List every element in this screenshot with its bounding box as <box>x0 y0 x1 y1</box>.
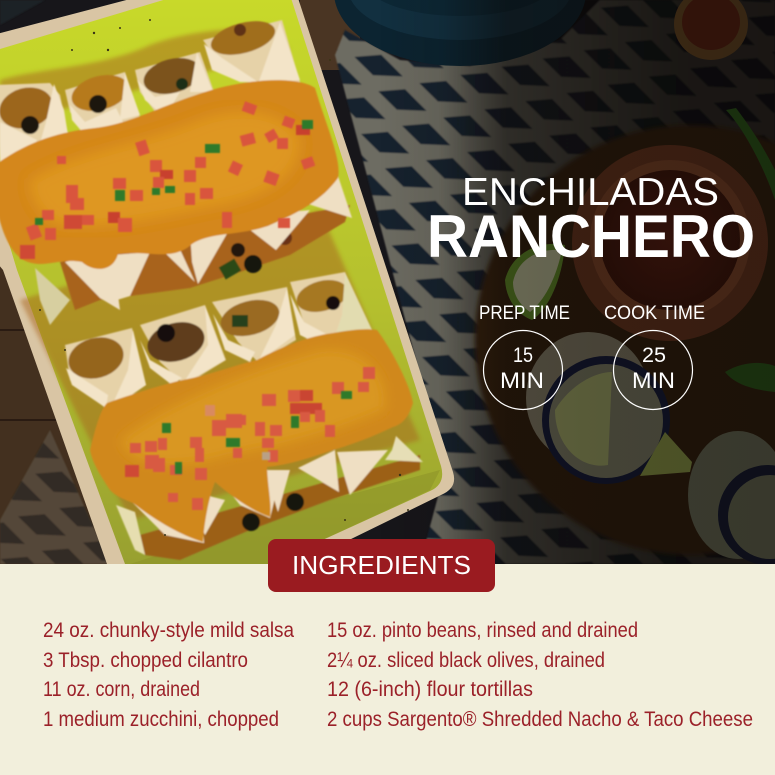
top fillings <box>0 15 279 134</box>
prep time badge: MIN <box>500 368 544 393</box>
ingredient list: left column: 11 oz. corn, drained <box>43 678 200 701</box>
dish speckles <box>39 19 409 536</box>
small spoon of salsa <box>674 0 748 60</box>
ingredients heading banner <box>268 539 495 592</box>
top tortilla flaps <box>0 22 300 165</box>
olives in lower filling <box>242 493 304 531</box>
tomato topping lower <box>125 367 375 510</box>
upper bottom tortilla flaps <box>35 170 352 325</box>
ingredients heading banner: INGREDIENTS <box>292 550 471 580</box>
cook time badge <box>604 303 705 410</box>
cook time badge: COOK TIME <box>604 303 705 324</box>
lower filling <box>140 455 420 560</box>
title: enchiladas ranchero: RANCHERO <box>427 203 755 270</box>
margarita glass <box>526 332 670 484</box>
cook time badge: 25 <box>642 343 666 367</box>
green chili peppers <box>725 108 775 392</box>
round wooden board <box>475 125 775 555</box>
woven ikat fabric <box>0 0 775 564</box>
upper bottom filling <box>60 205 350 310</box>
cook time badge: MIN <box>632 368 675 393</box>
lower cheese blanket <box>90 329 413 542</box>
baked sauce stains on dish <box>0 25 420 520</box>
ingredient list: left column: 1 medium zucchini, chopped <box>43 708 279 731</box>
ingredient list: right column: 15 oz. pinto beans, rinsed and drained <box>327 619 638 642</box>
dish rim <box>0 0 454 564</box>
prep time badge: PREP TIME <box>479 303 570 324</box>
ingredient list: right column: 12 (6-inch) flour tortillas <box>327 678 533 701</box>
baking dish <box>0 0 454 564</box>
green chili topping upper <box>35 120 313 225</box>
prep time badge <box>479 303 570 410</box>
wooden table <box>0 0 360 564</box>
lower top tortilla flaps <box>66 273 372 410</box>
green chili topping lower <box>162 391 352 474</box>
lower top tortilla cones <box>65 272 372 410</box>
ingredient list: right column: 2¼ oz. sliced black olives, drained <box>327 649 605 672</box>
ingredients panel background <box>0 564 775 775</box>
tomato topping upper <box>20 101 315 259</box>
lower top fillings <box>64 275 351 385</box>
lime wedge <box>505 244 565 320</box>
ingredient list: left column: 24 oz. chunky-style mild salsa <box>43 619 294 642</box>
prep time badge: 15 <box>513 343 533 367</box>
title: enchiladas ranchero <box>427 171 755 270</box>
cast shadow along dish bottom <box>130 470 440 564</box>
lime garnish slice <box>640 432 692 476</box>
lower enchilada row <box>64 272 423 560</box>
upper cheese blanket <box>0 80 339 269</box>
clay salsa bowl <box>572 145 768 341</box>
zucchini and olives in filling <box>219 231 292 280</box>
ingredient list: left column <box>43 619 294 731</box>
ingredient list: left column: 3 Tbsp. chopped cilantro <box>43 649 248 672</box>
upper enchilada row <box>0 15 352 325</box>
lower tortilla flaps <box>116 436 423 555</box>
darkening overlay on right of photo <box>380 0 775 564</box>
ingredient list: right column <box>327 619 753 731</box>
dish inner green <box>0 0 442 564</box>
top tortilla cones <box>0 20 300 162</box>
hero photo: table scene with enchilada dish <box>0 0 775 565</box>
title: enchiladas ranchero: ENCHILADAS <box>462 171 719 214</box>
second margarita glass <box>688 431 775 565</box>
navy stacked bowl <box>334 0 586 66</box>
